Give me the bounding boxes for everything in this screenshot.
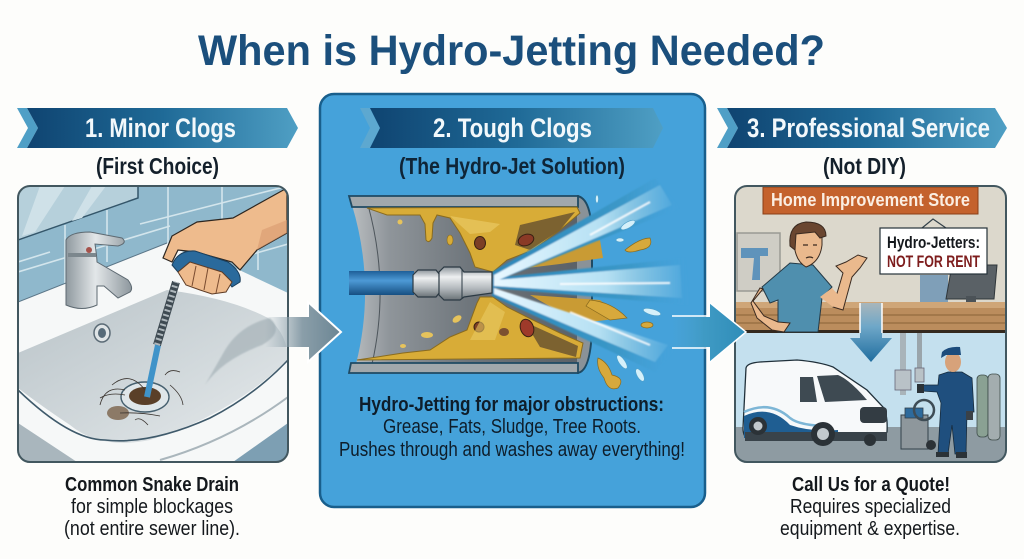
- wall pipes and meter: [895, 333, 924, 395]
- gas cylinders: [977, 374, 1000, 440]
- hand gripping handle: [163, 188, 287, 294]
- basin: [18, 290, 288, 443]
- caption: call for quote: Requires specialized: [790, 496, 951, 518]
- jetting machine: [901, 400, 936, 450]
- subheading: not diy: (Not DIY): [823, 153, 906, 179]
- drain and hair: [100, 371, 183, 425]
- arrow: store to professional: [850, 303, 892, 362]
- banner: step 2: [360, 108, 663, 148]
- monitor and chair: [920, 265, 997, 304]
- hose and nozzle: [349, 267, 492, 300]
- water jet: [492, 178, 690, 372]
- grease clog: bottom: [357, 295, 622, 360]
- wall tool display: [737, 233, 780, 291]
- sink counter: [18, 243, 288, 470]
- caption: snake drain: [64, 474, 240, 540]
- text: hydro-jetting explanation: [339, 394, 685, 461]
- subheading: first choice: (First Choice): [96, 153, 219, 179]
- debris splatter: [586, 238, 653, 389]
- sign: not for rent: [880, 219, 987, 274]
- service van: [743, 360, 887, 446]
- title: When is Hydro-Jetting Needed?: [198, 27, 825, 75]
- sign: not for rent: Hydro-Jetters:: [887, 233, 980, 252]
- caption: call for quote: [780, 474, 960, 540]
- customer: [751, 222, 867, 332]
- text: hydro-jetting explanation: Hydro-Jetting for major obstructions:: [359, 394, 664, 416]
- text: hydro-jetting explanation: Grease, Fats, Sludge, Tree Roots.: [383, 416, 641, 438]
- store sign: Home Improvement Store: [771, 190, 970, 210]
- grease clog: top: [367, 207, 603, 272]
- technician: [917, 347, 974, 458]
- illustration: pipe with hydro-jet: [349, 178, 690, 389]
- illustration: store and service van: [735, 186, 1006, 463]
- store sign: [763, 187, 978, 214]
- pipe body: [349, 196, 592, 373]
- arrow: minor to tough: [265, 302, 341, 362]
- banner: step 1: [17, 108, 298, 148]
- illustration: snake drain in sink: [18, 186, 288, 470]
- caption: call for quote: Call Us for a Quote!: [792, 474, 950, 496]
- faucet: [66, 232, 132, 308]
- panel: professional service: [717, 108, 1007, 540]
- sign: not for rent: NOT FOR RENT: [887, 252, 980, 271]
- subheading: hydro-jet solution: (The Hydro-Jet Solution): [399, 153, 625, 179]
- caption: snake drain: (not entire sewer line).: [64, 518, 240, 540]
- caption: snake drain: Common Snake Drain: [65, 474, 239, 496]
- banner: step 3: [717, 108, 1007, 148]
- snake rod: [147, 282, 176, 397]
- caption: call for quote: equipment & expertise.: [780, 518, 960, 540]
- counter: [735, 302, 1006, 333]
- caption: snake drain: for simple blockages: [71, 496, 233, 518]
- water droplets: [596, 195, 661, 383]
- arrow: tough to professional: [672, 302, 746, 363]
- panel: minor clogs: [17, 108, 298, 540]
- text: hydro-jetting explanation: Pushes through and washes away everything!: [339, 439, 685, 461]
- banner: step 2: 2. Tough Clogs: [433, 113, 592, 143]
- mirror: [18, 186, 138, 240]
- overflow hole: [94, 324, 110, 342]
- panel background: [320, 94, 705, 507]
- panel: tough clogs: [320, 94, 705, 507]
- banner: step 1: 1. Minor Clogs: [85, 113, 236, 143]
